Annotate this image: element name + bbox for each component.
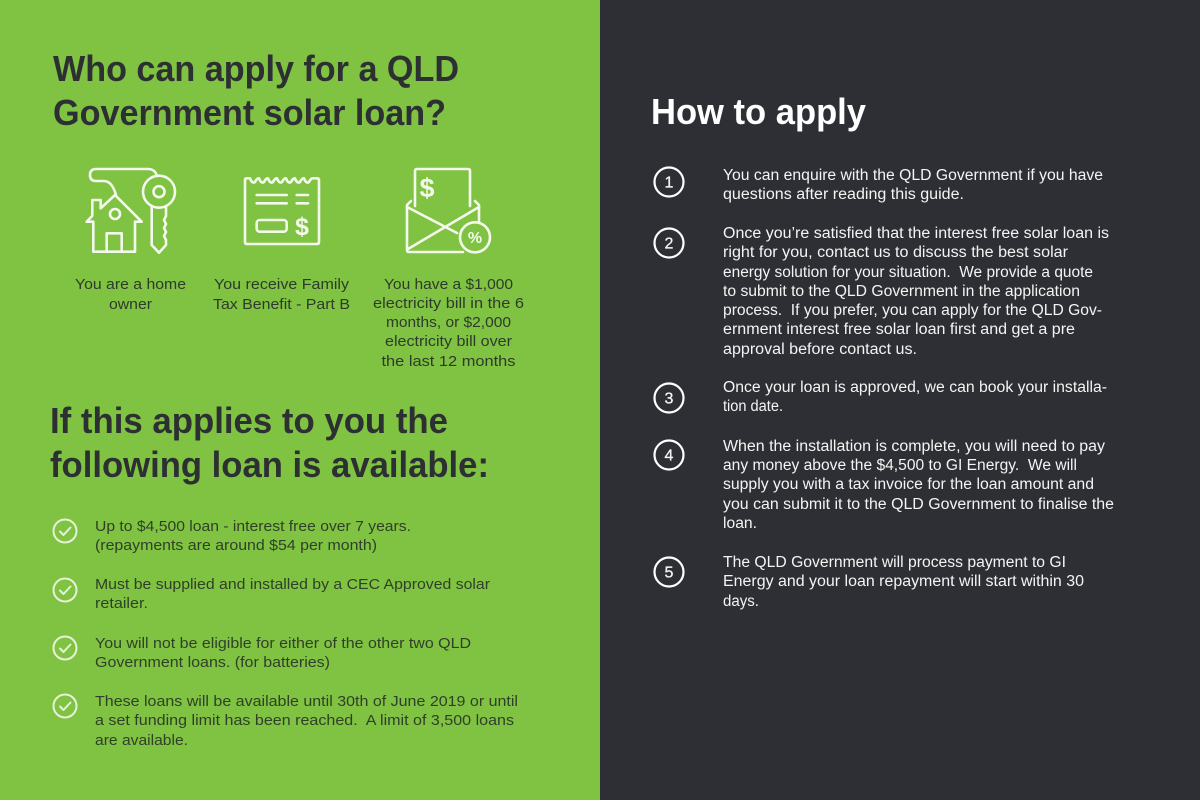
heading: loan available: If this applies to you the <box>50 400 448 441</box>
step 4: When the installation is complete, you will need to pay <box>723 438 1105 455</box>
step 2: process. If you prefer, you can apply for the QLD Gov- <box>723 302 1102 319</box>
icon: check <box>54 520 76 542</box>
list item: availability: a set funding limit has been reached. A limit of 3,500 loans <box>95 712 514 729</box>
list item: other loans: Government loans. (for batteries) <box>95 654 330 671</box>
step 2: to submit to the QLD Government in the application <box>723 283 1080 300</box>
badge: 2: 2 <box>665 236 674 252</box>
icon: envelope with dollar and percent: $ <box>419 173 435 203</box>
heading: loan available: following loan is available: <box>50 444 489 485</box>
step 3: Once your loan is approved, we can book your installa- <box>723 379 1107 396</box>
step 4: you can submit it to the QLD Government to finalise the <box>723 496 1114 513</box>
heading: how to apply: How to apply <box>651 91 866 132</box>
step 2: energy solution for your situation. We provide a quote <box>723 264 1093 281</box>
icon: check <box>54 578 76 602</box>
list item: approved retailer: retailer. <box>95 595 148 612</box>
badge: 1: 1 <box>665 174 674 192</box>
caption: electricity bill: You have a $1,000 <box>384 276 513 293</box>
caption: family tax benefit <box>213 276 350 313</box>
badge: 4 <box>654 440 684 470</box>
step 2: right for you, contact us to discuss the best solar <box>723 244 1068 261</box>
caption: electricity bill <box>373 276 524 370</box>
caption: electricity bill: months, or $2,000 <box>386 314 511 331</box>
caption: home owner: owner <box>109 296 152 313</box>
step 2 <box>654 225 1109 358</box>
panel: how to apply <box>600 0 1200 800</box>
list item: availability: are available. <box>95 732 188 749</box>
caption: home owner <box>75 276 186 313</box>
icon: envelope with dollar and percent: % <box>468 230 482 247</box>
caption: family tax benefit: You receive Family <box>214 276 350 293</box>
icon: check <box>54 694 76 718</box>
caption: home owner: You are a home <box>75 276 186 293</box>
heading: who can apply <box>53 48 459 133</box>
badge: 2 <box>654 228 684 258</box>
step 5 <box>654 554 1084 610</box>
icon: house and key <box>87 169 175 253</box>
badge: 5 <box>654 558 684 586</box>
step 3: tion date. <box>723 398 783 415</box>
step 5: Energy and your loan repayment will start within 30 <box>723 573 1084 590</box>
list item: loan amount: Up to $4,500 loan - interest free over 7 years. <box>95 518 411 535</box>
list item: loan amount: (repayments are around $54 per month) <box>95 537 377 554</box>
caption: electricity bill: electricity bill over <box>385 333 512 350</box>
step 1: questions after reading this guide. <box>723 186 964 203</box>
list item: approved retailer <box>54 576 490 612</box>
list item: availability: These loans will be available until 30th of June 2019 or until <box>95 693 518 710</box>
step 2: ernment interest free solar loan first and get a pre <box>723 321 1075 338</box>
step 3 <box>654 379 1107 415</box>
step 5: The QLD Government will process payment to GI <box>723 554 1066 571</box>
caption: electricity bill: the last 12 months <box>382 353 516 370</box>
step 4 <box>654 438 1114 532</box>
list item: availability <box>54 693 518 749</box>
list item: other loans: You will not be eligible for either of the other two QLD <box>95 635 471 652</box>
icon: bill: $ <box>295 213 309 241</box>
step 2: Once you’re satisfied that the interest free solar loan is <box>723 225 1109 242</box>
list item: other loans <box>54 635 471 671</box>
list item: approved retailer: Must be supplied and installed by a CEC Approved solar <box>95 576 490 593</box>
caption: family tax benefit: Tax Benefit - Part B <box>213 296 350 313</box>
step 2: approval before contact us. <box>723 341 917 358</box>
step 4: supply you with a tax invoice for the loan amount and <box>723 476 1094 493</box>
step 1: You can enquire with the QLD Government if you have <box>723 167 1103 184</box>
list item: loan amount <box>54 518 411 554</box>
panel: eligibility <box>0 0 600 800</box>
badge: 5: 5 <box>665 564 674 582</box>
icon: envelope with dollar and percent <box>407 169 490 252</box>
heading: who can apply: Government solar loan? <box>53 92 446 133</box>
step 4: any money above the $4,500 to GI Energy. We will <box>723 457 1077 474</box>
step 1 <box>654 167 1103 203</box>
heading: who can apply: Who can apply for a QLD <box>53 48 459 89</box>
icon: bill <box>245 178 319 244</box>
caption: electricity bill: electricity bill in the 6 <box>373 295 524 312</box>
step 5: days. <box>723 593 759 610</box>
badge: 4: 4 <box>665 448 674 464</box>
badge: 1 <box>654 168 684 196</box>
badge: 3: 3 <box>665 390 674 408</box>
heading: loan available <box>50 400 489 485</box>
icon: check <box>54 636 76 660</box>
step 4: loan. <box>723 515 757 532</box>
badge: 3 <box>654 384 684 412</box>
